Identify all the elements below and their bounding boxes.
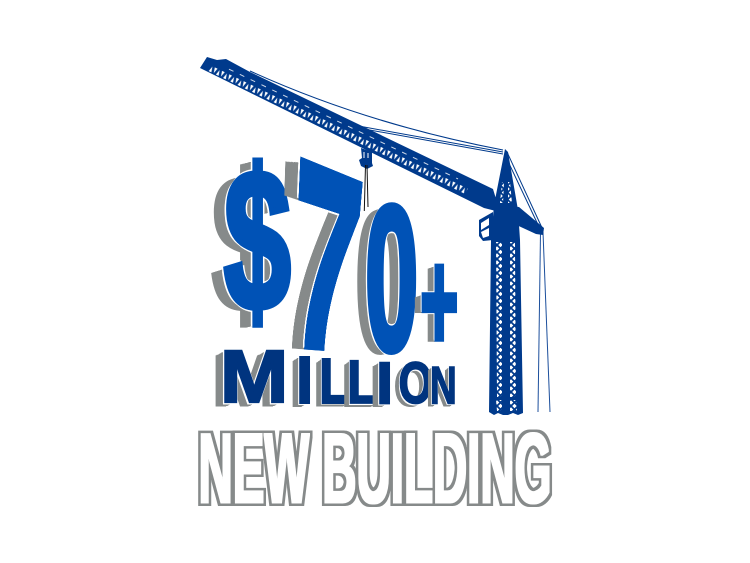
heading: NEW BUILDING: NEW BUILDING: [198, 414, 551, 524]
letter I: I: [376, 350, 393, 417]
dollar sign: $: [224, 129, 291, 353]
guy wires to boom: [250, 71, 543, 231]
letter O: O: [398, 351, 433, 416]
trolley and hook block: [359, 148, 373, 211]
counter jib: [496, 205, 544, 235]
plus sign: +: [420, 221, 459, 382]
letter L: L: [347, 348, 379, 417]
tower: [489, 149, 523, 415]
operator cab: [479, 212, 493, 241]
letter I: I: [296, 342, 313, 418]
digit 7: 7: [287, 93, 370, 394]
letter N: N: [430, 356, 457, 415]
boom: [200, 57, 500, 212]
letter L: L: [319, 345, 351, 417]
tower lattice: [496, 182, 517, 411]
hoist cables: [538, 232, 550, 412]
digit 0: 0: [365, 164, 418, 395]
letter M: M: [220, 336, 288, 418]
boom lattice: [208, 61, 470, 194]
